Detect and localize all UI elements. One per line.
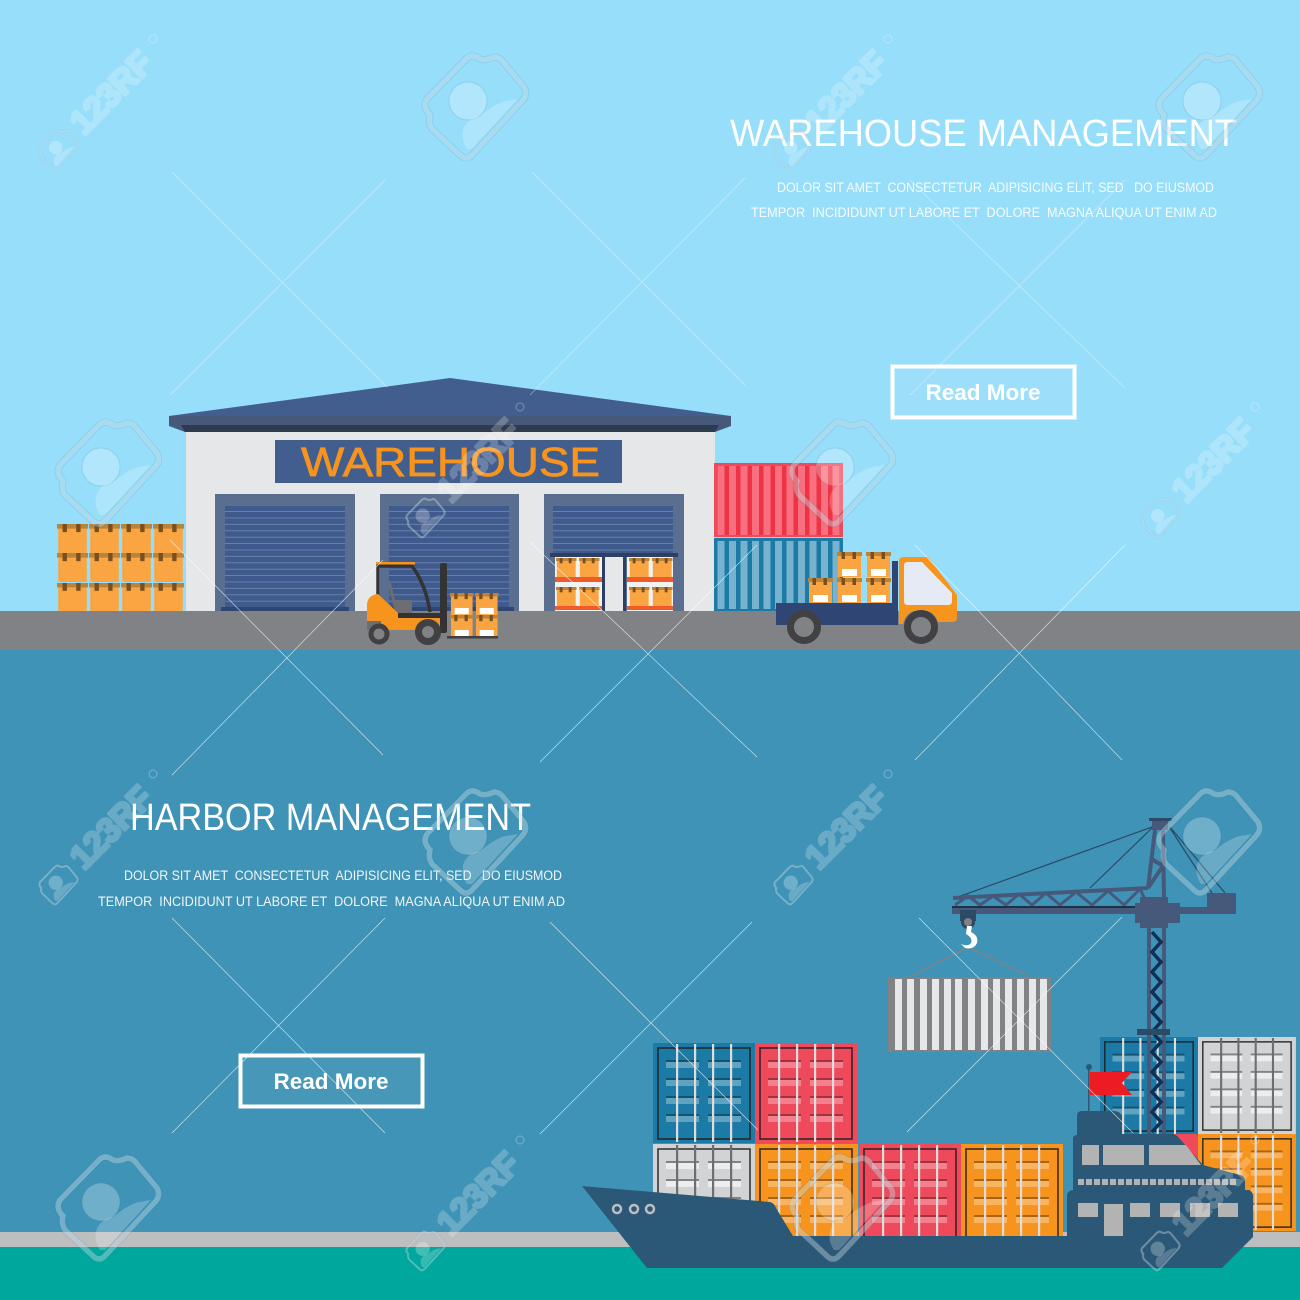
harbor title: HARBOR MANAGEMENT: [130, 797, 531, 839]
forklift wheels: [371, 622, 438, 642]
watermark: 123RF lower left: [39, 770, 160, 904]
crane hub: [1135, 897, 1180, 928]
building wall: [186, 430, 715, 611]
blue container: [653, 1043, 755, 1143]
ship railing: [1078, 1179, 1236, 1185]
blue container: [1100, 1037, 1198, 1135]
stacked boxes left of warehouse: [57, 524, 184, 611]
warehouse description: DOLOR SIT AMET CONSECTETUR ADIPISICING ELIT, SED DO EIUSMOD: [777, 180, 1214, 195]
lifting ropes: [910, 947, 1030, 977]
red container: [859, 1144, 961, 1243]
button: warehouse read more: [892, 366, 1074, 418]
watermark: 123RF middle right: [1141, 403, 1262, 537]
door 2: [380, 494, 519, 611]
crane jib: [952, 888, 1148, 914]
blue container: [714, 538, 843, 611]
door 1: [215, 494, 355, 611]
white container: [653, 1144, 755, 1243]
watermark: 123RF top centre: [774, 35, 895, 169]
white container: [1198, 1037, 1296, 1134]
red container: [714, 463, 843, 537]
panel: warehouse sky background: [0, 0, 1300, 611]
forklift body: [367, 594, 440, 630]
ship upper windows: [1082, 1145, 1201, 1165]
watermark: 123RF top left: [39, 35, 160, 169]
warehouse description: [751, 180, 1217, 220]
warehouse title: WAREHOUSE MANAGEMENT: [730, 113, 1237, 155]
crane: [952, 818, 1236, 1135]
warehouse description: TEMPOR INCIDIDUNT UT LABORE ET DOLORE MAGNA ALIQUA UT ENIM AD: [751, 205, 1217, 220]
button: harbor read more: [240, 1056, 422, 1106]
crane hook: [960, 910, 977, 948]
sign: WAREHOUSE: [301, 439, 600, 485]
crane counterweight: [1180, 893, 1236, 914]
orange container: [755, 1144, 858, 1243]
forklift cab frame: [378, 566, 430, 612]
watermark: 123RF lower centre: [774, 770, 895, 904]
watermark: 123RF bottom: [406, 1136, 527, 1270]
forklift boxes: [450, 593, 498, 637]
ship flag: [1086, 1064, 1132, 1114]
ship lower windows and door: [1078, 1203, 1238, 1236]
roof: [169, 378, 731, 432]
truck cargo boxes: [808, 552, 891, 603]
harbor description: [98, 868, 565, 909]
truck wheels: [790, 614, 934, 640]
button: warehouse read more: Read More: [925, 380, 1041, 405]
ship hull and superstructure: [582, 1111, 1253, 1268]
shipping containers: red and blue stack: [714, 463, 843, 611]
ship portholes: [613, 1205, 654, 1213]
hanging grey container: [888, 947, 1051, 1052]
crane mast: [1137, 925, 1170, 1135]
orange container: [1198, 1134, 1296, 1231]
door 3 with shelves: [544, 494, 684, 611]
warehouse building: [169, 378, 731, 611]
truck bed: [776, 561, 898, 625]
container stack on the quay: [653, 1037, 1296, 1243]
panel: harbor background: [0, 650, 1300, 1232]
decorative diagonal lines: harbor panel: [170, 540, 1133, 1134]
orange container: [961, 1144, 1063, 1243]
truck cab: [899, 557, 957, 624]
road: [0, 611, 1300, 650]
crane cables: [958, 827, 1225, 897]
forklift mast: [440, 563, 447, 633]
pier: [0, 1232, 1300, 1247]
cargo ship: [582, 1064, 1253, 1268]
red container: [755, 1043, 857, 1143]
red container: [1120, 1134, 1198, 1231]
delivery truck: [776, 552, 957, 640]
crane upper tower: [1148, 818, 1172, 897]
watermark: 123RF bottom right: [1141, 1136, 1262, 1270]
watermark: 123RF middle: [406, 403, 527, 537]
forklift: [367, 562, 498, 642]
harbor description: DOLOR SIT AMET CONSECTETUR ADIPISICING ELIT, SED DO EIUSMOD: [124, 868, 562, 883]
sea: [0, 1247, 1300, 1300]
forklift seat: [388, 583, 412, 613]
button: harbor read more: Read More: [273, 1069, 389, 1094]
harbor description: TEMPOR INCIDIDUNT UT LABORE ET DOLORE MAGNA ALIQUA UT ENIM AD: [98, 894, 565, 909]
decorative diagonal lines: warehouse panel: [170, 172, 1125, 395]
